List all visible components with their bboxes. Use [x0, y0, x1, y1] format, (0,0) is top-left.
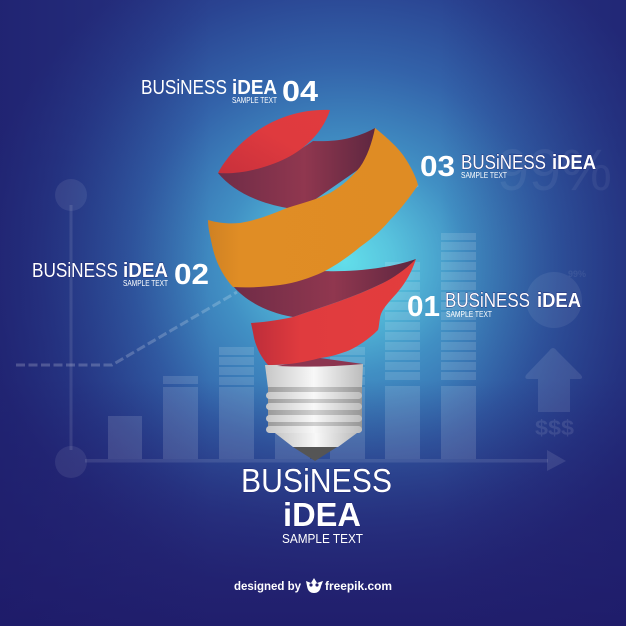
small maroon band — [277, 358, 363, 367]
orange band — [208, 128, 418, 287]
label: business idea 01 — [407, 290, 581, 323]
label: business idea 04: SAMPLE TEXT — [232, 96, 277, 105]
label: business idea 02: BUSiNESS — [32, 260, 118, 282]
label: business idea 01: SAMPLE TEXT — [446, 310, 492, 319]
label: business idea 03: iDEA — [552, 152, 596, 174]
label: business idea 02: iDEA — [123, 260, 168, 282]
label: business idea 02 — [32, 259, 209, 291]
footer credit — [234, 578, 392, 593]
lower red band — [251, 259, 416, 365]
upper maroon band — [218, 128, 375, 210]
footer credit: designed by — [234, 581, 302, 593]
light bulb — [208, 110, 418, 461]
label: business idea 04 — [141, 76, 318, 108]
background small percent: 99% — [568, 269, 586, 279]
bars — [108, 233, 476, 459]
axis nodes — [55, 179, 87, 478]
background chart — [16, 138, 612, 478]
background big percent: 99% — [497, 138, 612, 203]
bulb screw base — [265, 364, 363, 461]
title: BUSiNESS — [241, 462, 392, 499]
trend line — [16, 185, 418, 365]
up arrow — [525, 348, 582, 412]
label: business idea 04: BUSiNESS — [141, 77, 227, 99]
label: business idea 02: 02 — [174, 259, 209, 291]
label: business idea 01: iDEA — [537, 290, 581, 312]
lower maroon band — [233, 259, 416, 317]
label: business idea 03: BUSiNESS — [461, 152, 546, 174]
label: business idea 03 — [420, 151, 596, 183]
label: business idea 04: iDEA — [232, 77, 277, 99]
icon: freepik mascot — [306, 578, 323, 593]
top red leaf — [218, 110, 330, 173]
title — [241, 462, 392, 546]
background circle — [526, 272, 582, 328]
label: business idea 02: SAMPLE TEXT — [123, 279, 168, 288]
label: business idea 03: SAMPLE TEXT — [461, 171, 507, 180]
title: SAMPLE TEXT — [282, 531, 363, 546]
footer credit: freepik.com — [325, 581, 392, 593]
label: business idea 01: BUSiNESS — [445, 290, 530, 312]
axes — [70, 205, 566, 471]
label: business idea 04: 04 — [282, 76, 318, 108]
title: iDEA — [283, 496, 361, 533]
label: business idea 01: 01 — [407, 291, 440, 323]
label: business idea 03: 03 — [420, 151, 455, 183]
dollars: $$$ — [535, 417, 574, 440]
